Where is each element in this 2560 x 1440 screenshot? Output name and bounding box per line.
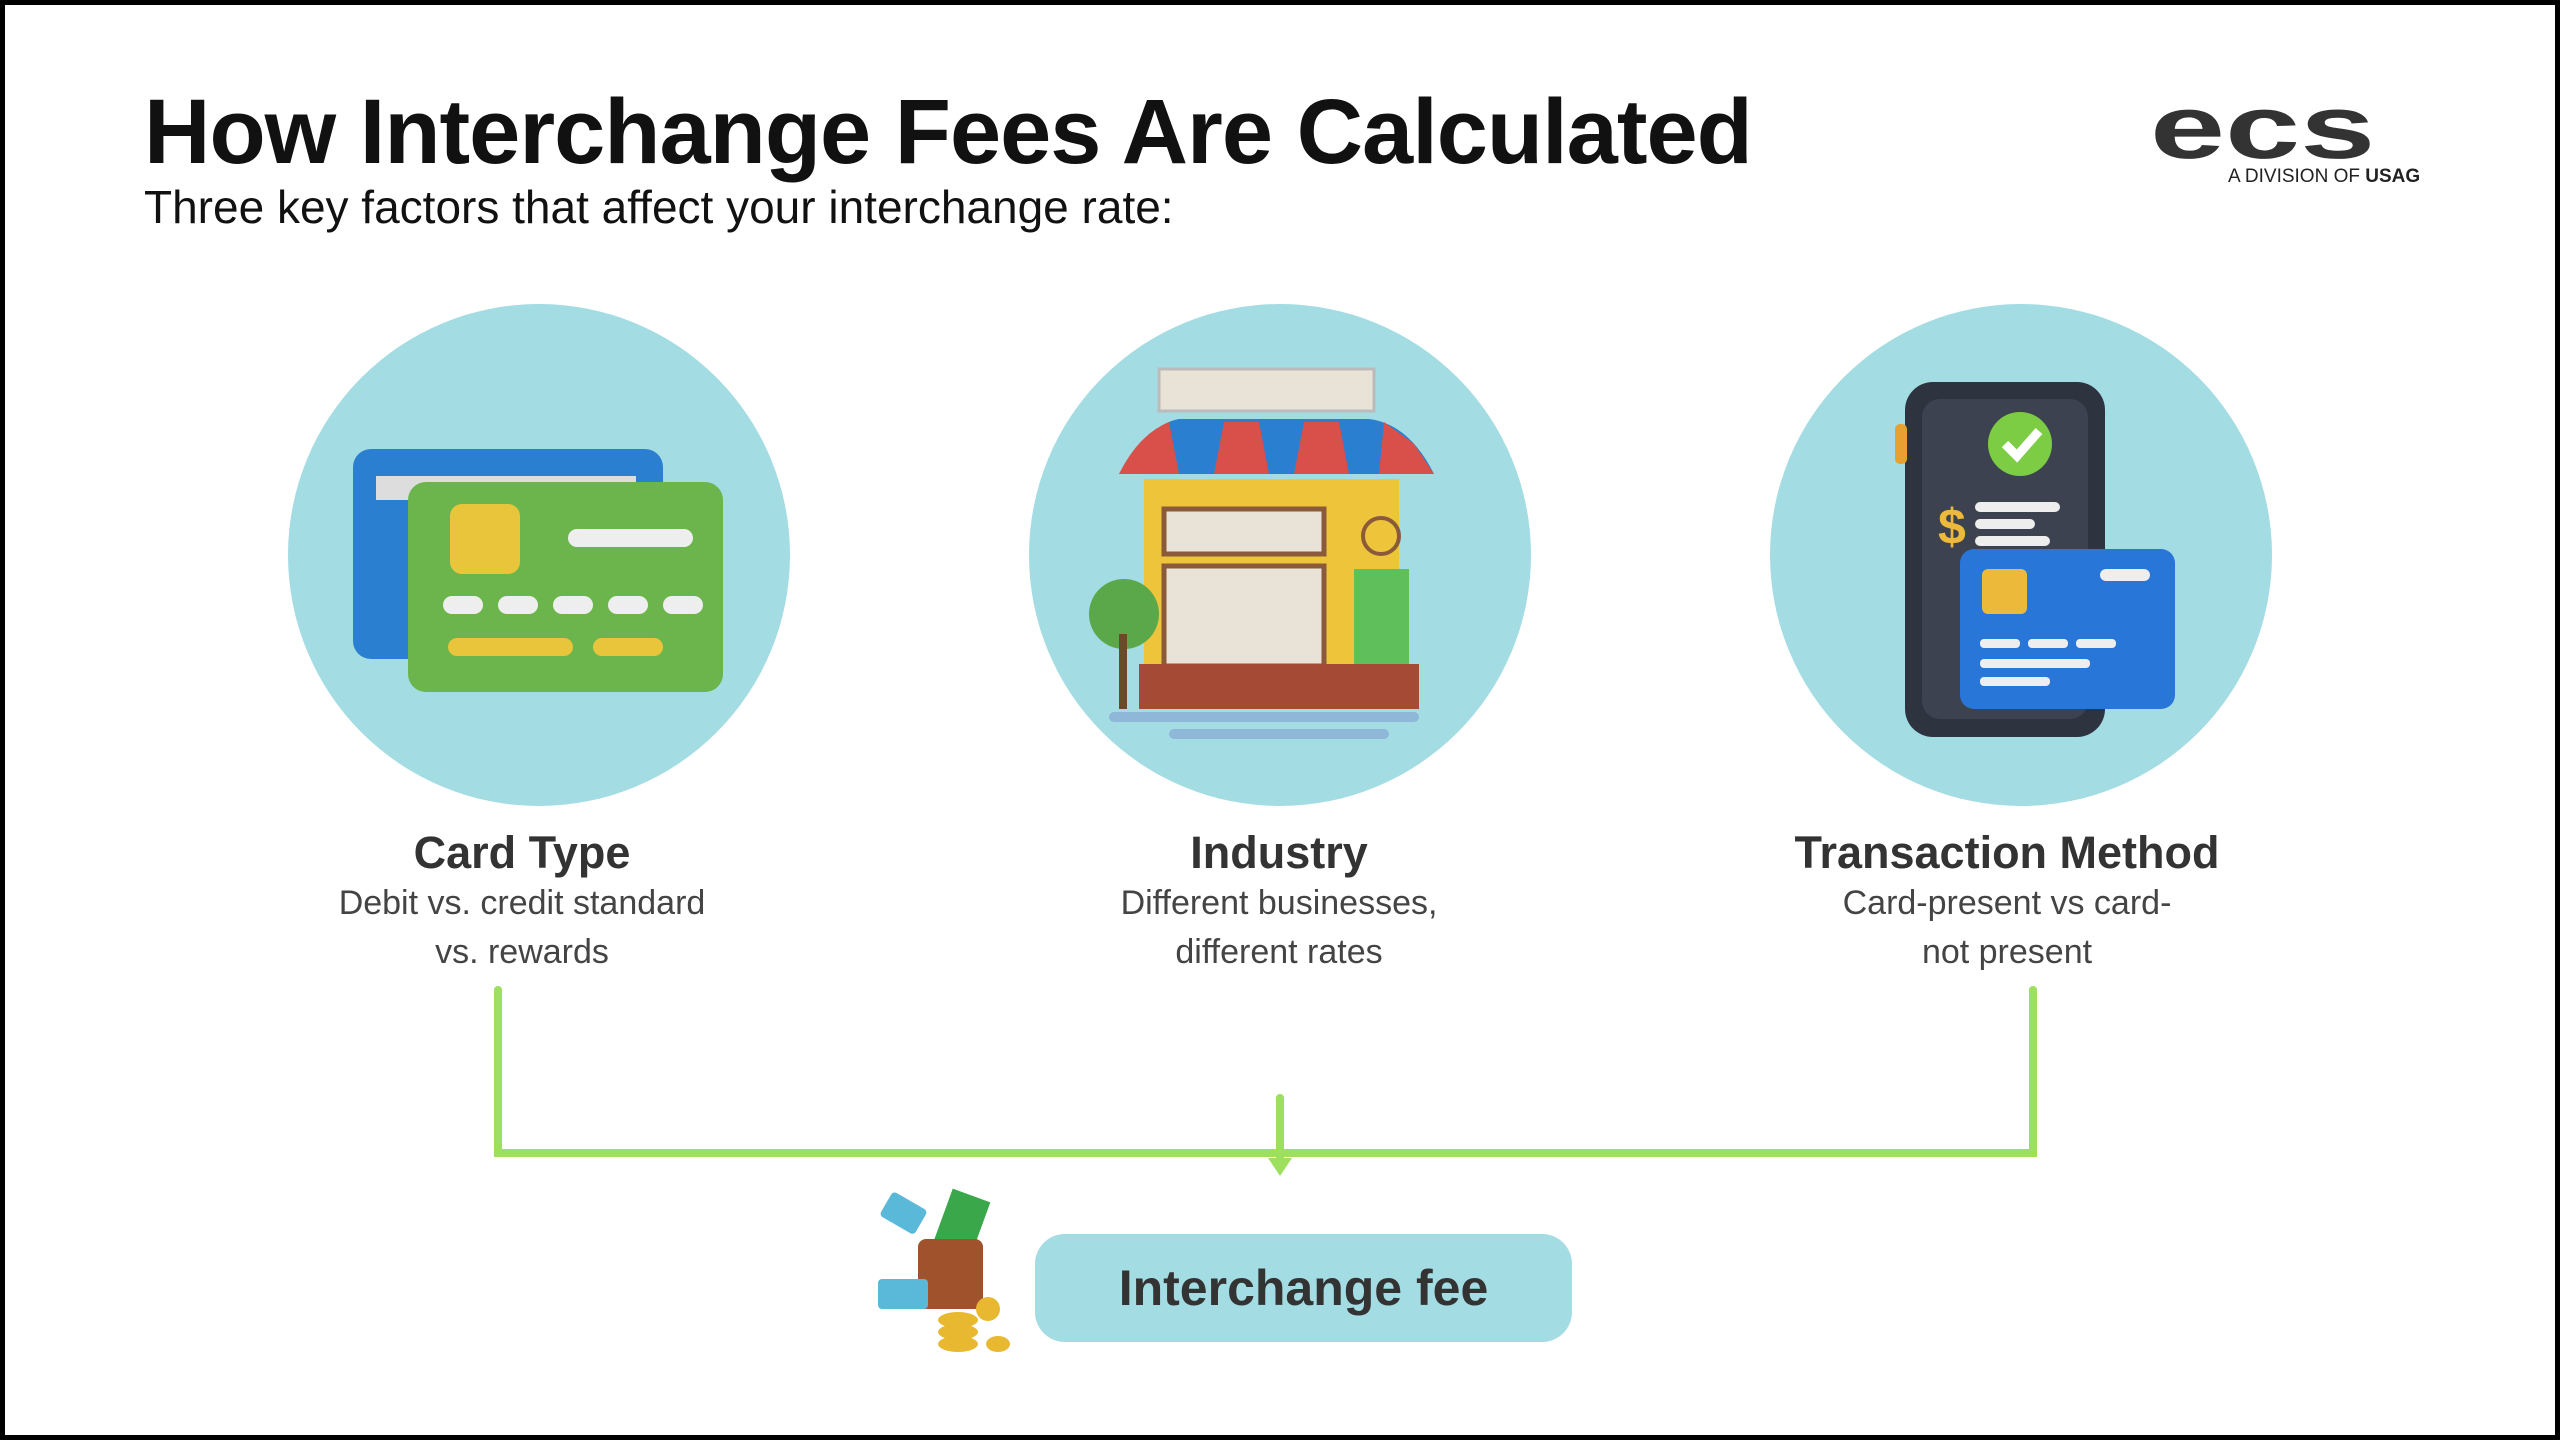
label: transaction method: not present: [1922, 933, 2092, 971]
label: card type: vs. rewards: [435, 933, 609, 971]
label: industry: Industry: [1190, 827, 1368, 878]
label: industry: Different businesses,: [1121, 884, 1437, 922]
label: card type: Card Type: [414, 827, 630, 878]
panel: card type: [288, 304, 790, 806]
callout: interchange fee: Interchange fee: [1119, 1260, 1488, 1316]
label: card type: Debit vs. credit standard: [339, 884, 705, 922]
panel: transaction method: [1770, 304, 2272, 806]
label: industry: different rates: [1175, 933, 1383, 971]
title: How Interchange Fees Are Calculated: [144, 81, 1752, 183]
icon: storefront: [1089, 368, 1434, 739]
logo: ecs: [2150, 78, 2375, 178]
icon: phone with card: [1895, 382, 2175, 737]
label: transaction method: [1794, 827, 2220, 971]
icon: phone with card: $: [1938, 499, 1966, 555]
icon: wallet with money: [878, 1188, 1010, 1352]
logo: A DIVISION OF USAG: [2228, 166, 2420, 187]
label: industry: [1121, 827, 1437, 971]
callout: interchange fee: [1035, 1234, 1572, 1342]
label: transaction method: Card-present vs card-: [1843, 884, 2171, 922]
panel: industry: [1029, 304, 1531, 806]
label: transaction method: Transaction Method: [1794, 827, 2220, 878]
icon: credit cards: [353, 449, 723, 692]
subtitle: Three key factors that affect your interchange rate:: [144, 181, 1174, 233]
label: card type: [339, 827, 705, 971]
